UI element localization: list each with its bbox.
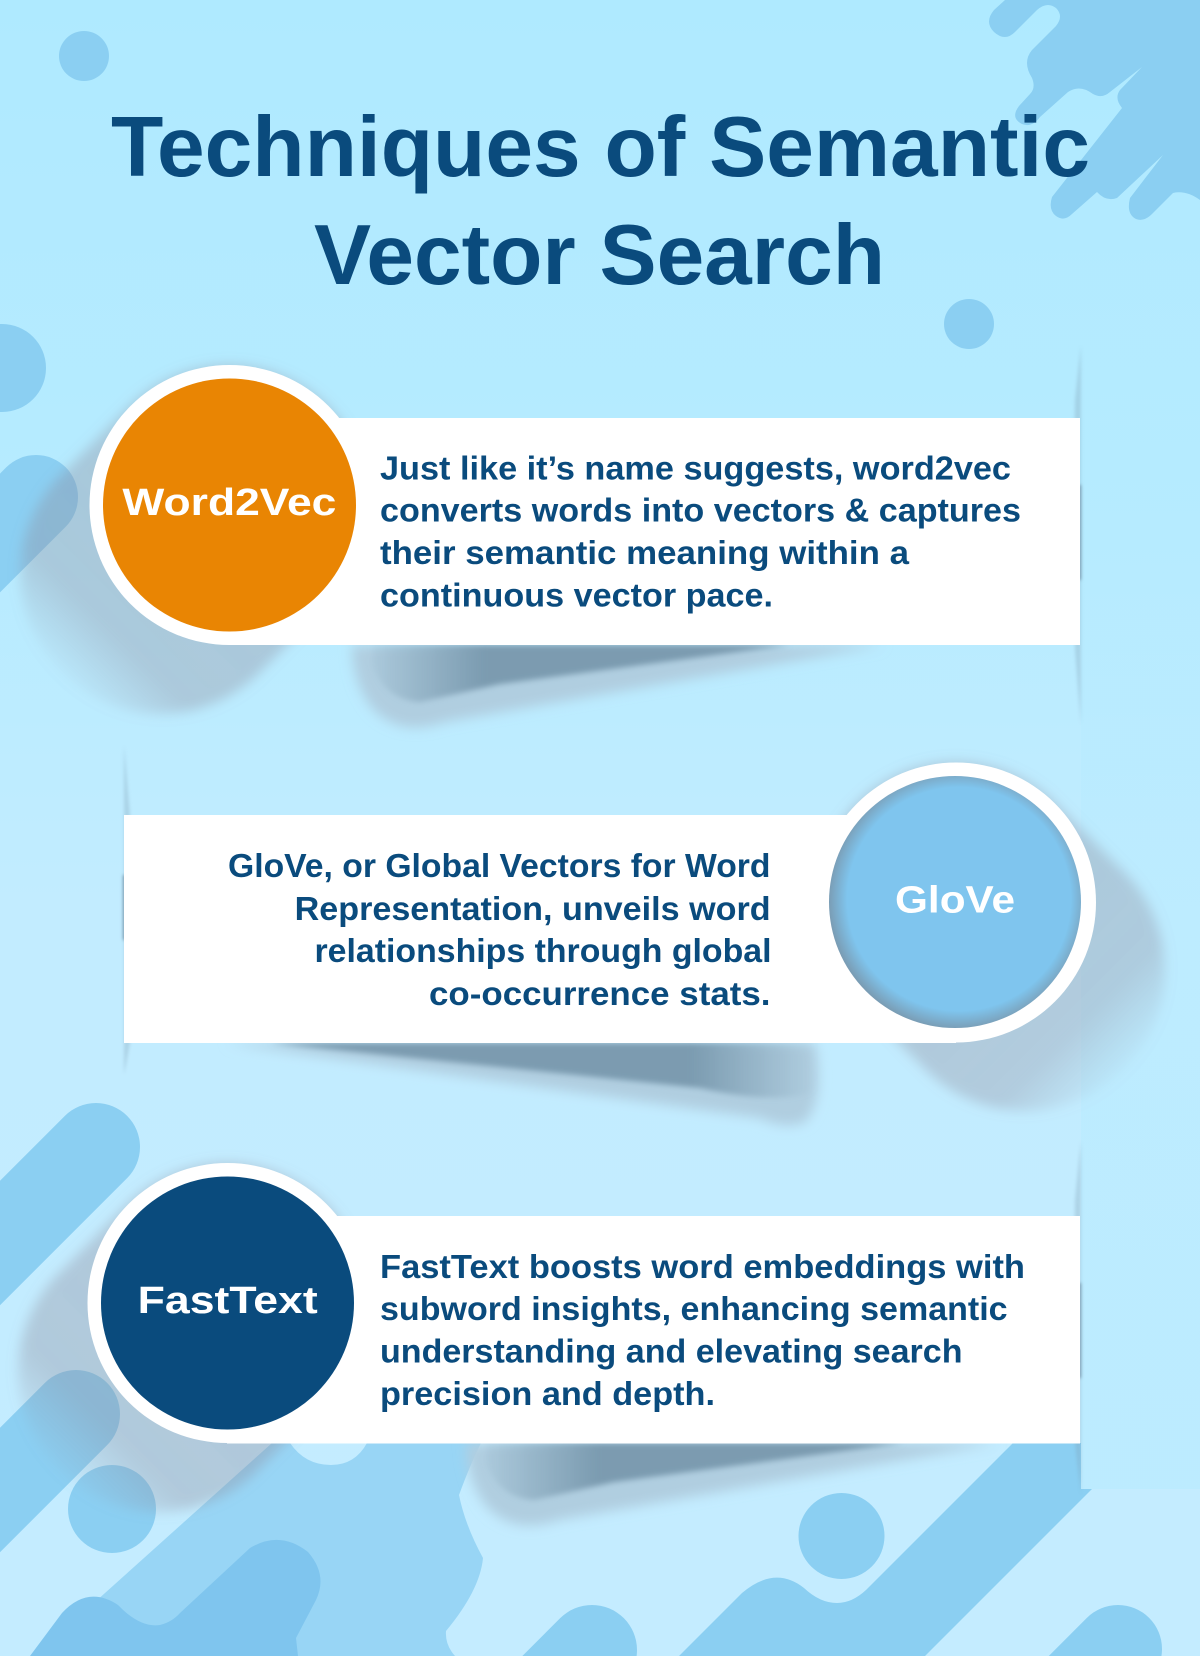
- description: GloVe, or Global Vectors for Word: [228, 847, 770, 884]
- description: precision and depth.: [380, 1375, 715, 1412]
- circle cast shadow: [160, 505, 229, 574]
- card 3: FastText: [88, 1140, 1081, 1526]
- description: subword insights, enhancing semantic: [380, 1290, 1008, 1327]
- circle cast shadow: [158, 1303, 227, 1372]
- circle label: Word2Vec: [122, 482, 336, 524]
- white card: [124, 815, 956, 1043]
- title: [111, 100, 1090, 303]
- band: bottom centre left: [40, 1443, 483, 1656]
- description: understanding and elevating search: [380, 1333, 962, 1370]
- description: FastText boosts word embeddings with: [380, 1248, 1025, 1285]
- right margin tint: [1081, 340, 1200, 1489]
- description: continuous vector pace.: [380, 576, 773, 614]
- band: bottom right: [679, 1443, 1092, 1656]
- circle: bottom right: [798, 1493, 884, 1579]
- description: [380, 450, 1021, 614]
- card 2: GloVe: [123, 745, 1096, 1125]
- blue circle: [829, 776, 1081, 1028]
- card bottom shadow: [225, 1043, 818, 1125]
- card edge shadow: [1073, 1140, 1081, 1495]
- description: relationships through global: [314, 932, 772, 969]
- circle label: FastText: [138, 1280, 318, 1322]
- orange circle: [103, 378, 356, 632]
- card 1: Word2Vec: [90, 345, 1081, 728]
- description: their semantic meaning within a: [380, 534, 910, 571]
- white card: [227, 1216, 1080, 1444]
- circle: below title right: [944, 299, 994, 349]
- title: Techniques of Semantic: [111, 100, 1090, 195]
- card edge shadow: [1073, 345, 1081, 725]
- card bottom shadow: [352, 645, 885, 728]
- capsule: bottom left lower: [0, 1414, 76, 1600]
- description: [380, 1248, 1025, 1412]
- description: [228, 847, 772, 1012]
- splash: top right: [989, 0, 1200, 220]
- description: converts words into vectors & captures: [380, 492, 1021, 529]
- background shapes: top: [0, 0, 1200, 643]
- circle: top left: [59, 31, 109, 81]
- circle cast shadow: [956, 902, 1025, 971]
- capsule: left edge: [0, 497, 36, 643]
- card edge shadow: [123, 745, 132, 1075]
- ring: [88, 1163, 368, 1443]
- capsule: bottom centre: [540, 1650, 592, 1656]
- description: Representation, unveils word: [295, 890, 771, 927]
- capsule: bottom right corner: [1060, 1649, 1118, 1656]
- description: Just like it’s name suggests, word2vec: [380, 450, 1011, 486]
- ring: [816, 762, 1096, 1042]
- background shapes: bottom: [0, 1147, 1118, 1656]
- ring: [90, 365, 370, 645]
- circle: left edge: [0, 324, 46, 412]
- white card: [229, 418, 1080, 645]
- description: co-occurrence stats.: [429, 975, 770, 1012]
- circle label: GloVe: [895, 880, 1015, 922]
- capsule: bottom left upper: [0, 1147, 96, 1353]
- card bottom shadow: [466, 1443, 999, 1526]
- blob: bottom left dark: [30, 1540, 320, 1656]
- circle: bottom left: [68, 1465, 156, 1553]
- title: Vector Search: [314, 208, 885, 303]
- navy circle: [101, 1176, 354, 1430]
